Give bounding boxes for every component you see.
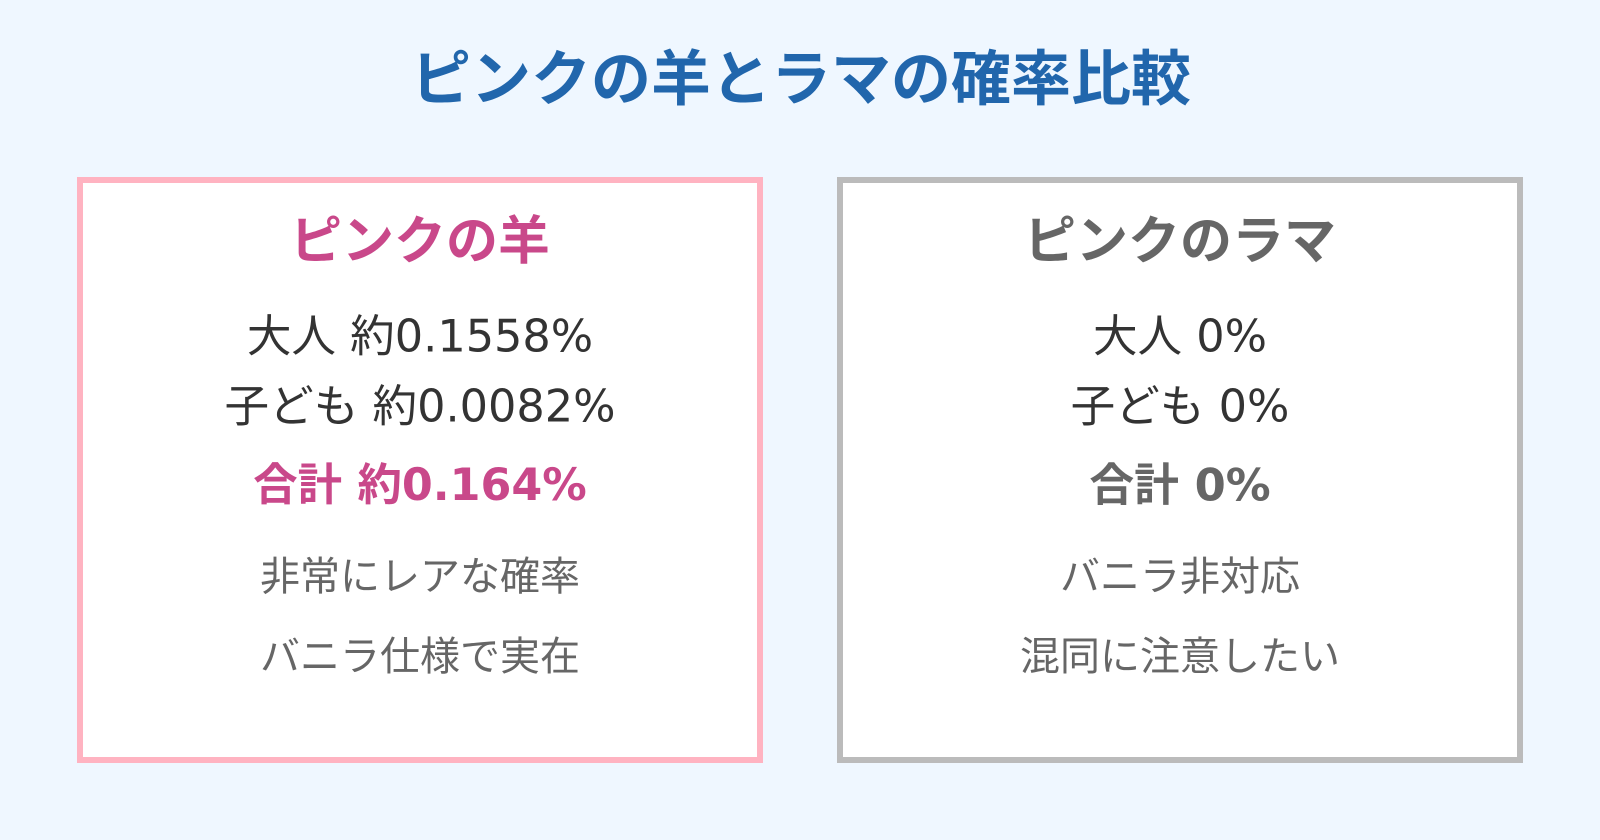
panel: pink sheep	[77, 177, 763, 763]
child probability: 子ども 0%	[1071, 381, 1289, 433]
adult probability: 大人 0%	[1093, 311, 1267, 363]
total probability: 合計 約0.164%	[253, 460, 587, 511]
adult probability: 大人 約0.1558%	[247, 311, 593, 363]
panel heading: pink llama: ピンクのラマ	[1024, 212, 1336, 272]
total probability: 合計 0%	[1089, 459, 1271, 512]
panel: pink llama	[837, 177, 1523, 763]
panel heading: pink sheep: ピンクの羊	[290, 212, 550, 272]
note: vanilla: バニラ仕様で実在	[260, 634, 580, 680]
note: not in vanilla: バニラ非対応	[1060, 554, 1300, 600]
title: ピンクの羊とラマの確率比較	[411, 45, 1191, 115]
note: rarity: 非常にレアな確率	[260, 554, 580, 600]
note: caution: 混同に注意したい	[1020, 634, 1340, 680]
child probability: 子ども 約0.0082%	[225, 381, 615, 433]
